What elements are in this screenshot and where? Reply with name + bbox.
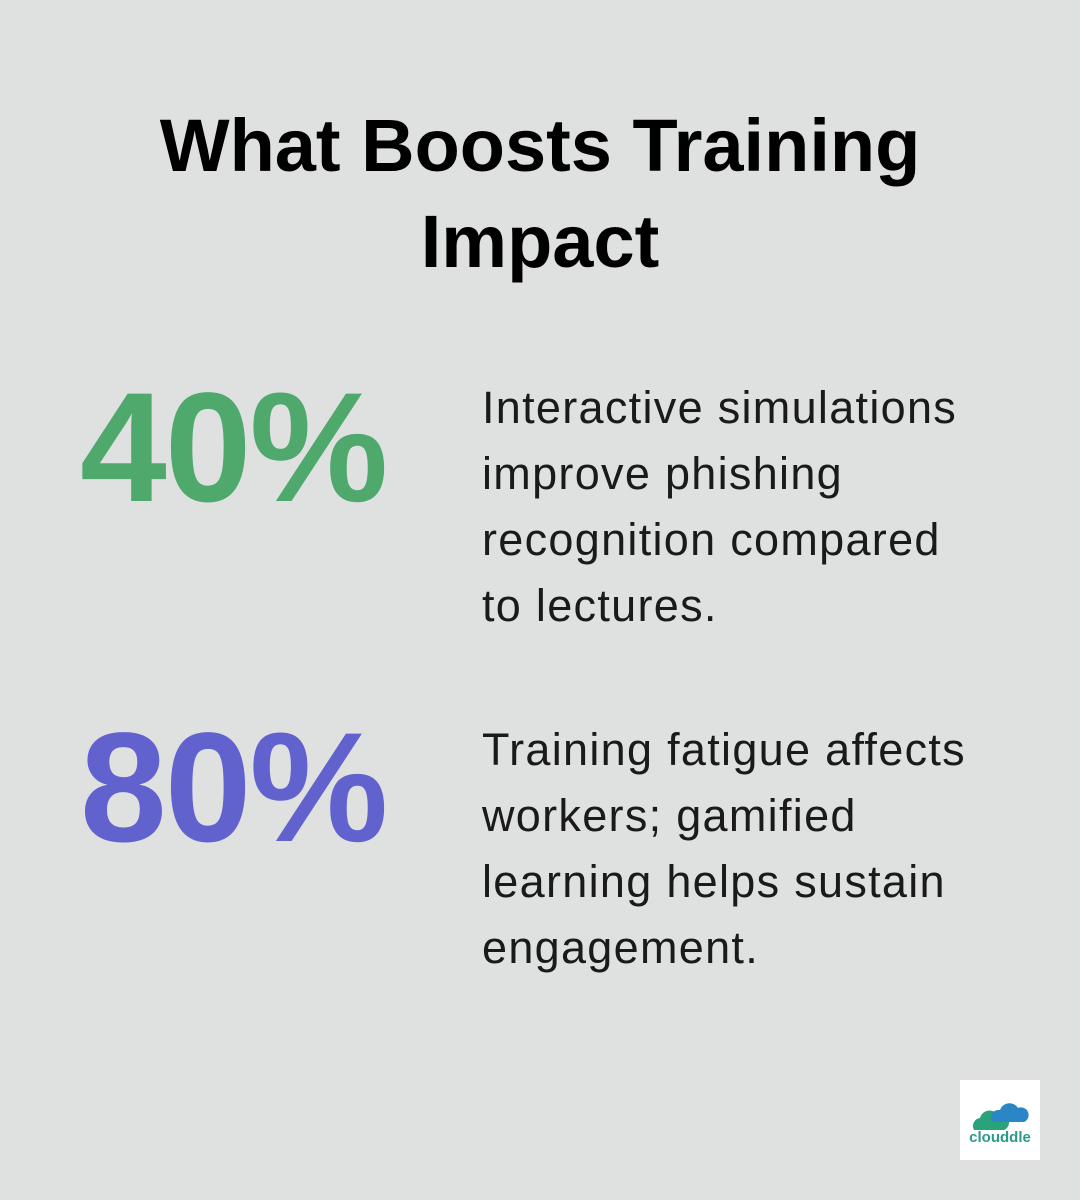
text: 80% description [482,724,966,973]
text: 80% description: workers; gamified [482,790,857,841]
text: 40% description [482,382,957,631]
title: Impact [421,200,659,283]
text: 40% description: improve phishing [482,448,843,499]
text: 40% description: Interactive simulations [482,382,957,433]
stat: 80%: 80% [80,701,386,875]
stat: 40%: 40% [80,361,386,535]
text: 80% description: engagement. [482,922,759,973]
title: What Boosts Training [160,104,920,187]
logo: clouddle: clouddle [969,1129,1031,1146]
text: 40% description: to lectures. [482,580,718,631]
text: 80% description: Training fatigue affects [482,724,966,775]
logo: clouddle [960,1080,1040,1160]
title [160,104,920,283]
text: 40% description: recognition compared [482,514,941,565]
text: 80% description: learning helps sustain [482,856,946,907]
